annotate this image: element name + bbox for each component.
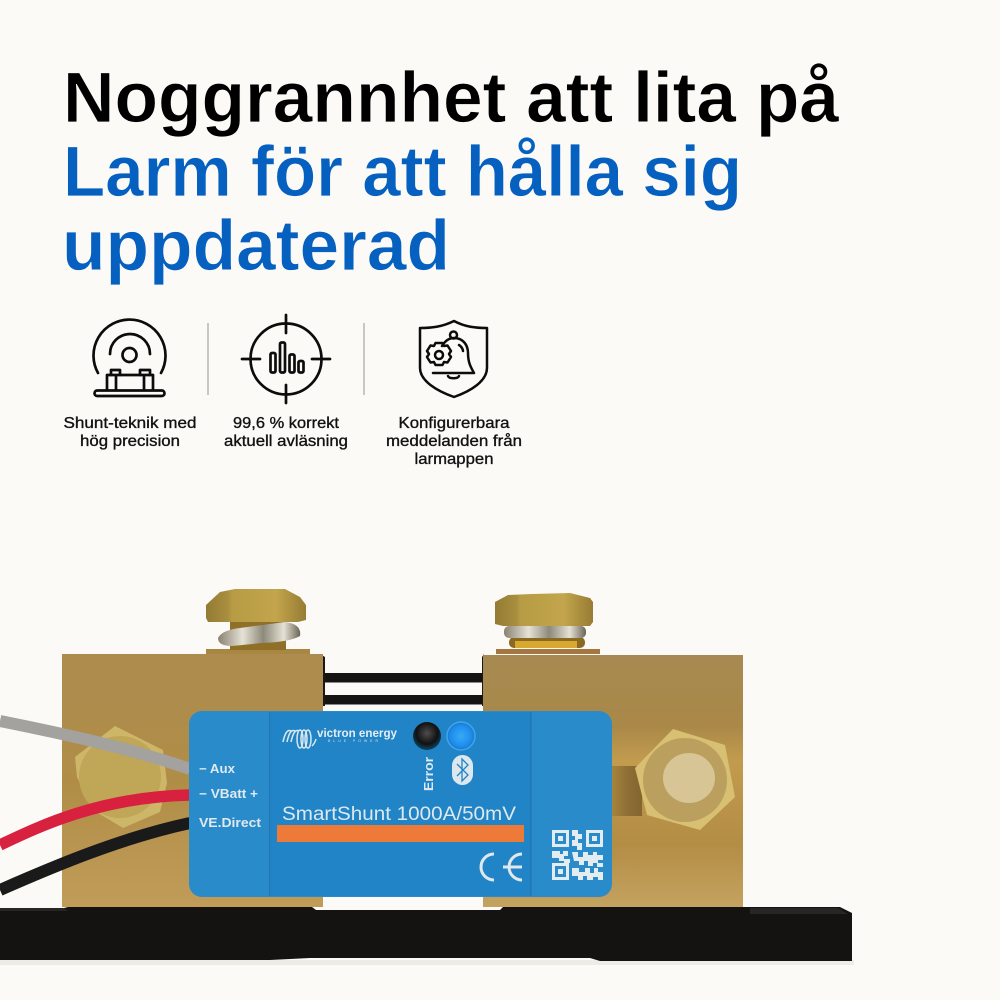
caption: alarm app: larmappen [414,451,494,468]
wire: grey [0,721,190,769]
title [62,59,840,286]
brass block left [62,654,323,907]
port labels: − VBatt + [199,787,258,801]
caption: alarm app [386,415,522,468]
caption: alarm app: meddelanden från [386,432,522,450]
bluetooth icon [452,755,473,785]
port labels [199,762,262,830]
victron logo [283,728,398,748]
subheading: blue lines: uppdaterad [62,207,450,286]
caption: alarm app: Konfigurerbara [398,415,510,432]
icon: shield with bell and gear [420,321,487,397]
product photo: SmartShunt [0,589,854,965]
caption: shunt technology [64,415,196,450]
icon: target with bars [242,315,330,403]
shunt resistor bars [320,654,485,706]
error LED: Error [422,757,436,791]
QR code [552,830,603,880]
top bolt right [495,593,600,654]
wire: black [0,823,190,890]
caption: accuracy: 99,6 % korrekt [233,415,340,432]
caption: accuracy: aktuell avläsning [224,433,348,450]
black mounting base [0,907,852,961]
port labels: VE.Direct [199,816,262,830]
caption: accuracy [224,415,348,450]
base shadow [0,960,854,965]
caption: shunt technology: hög precision [80,433,180,450]
icon: shunt [94,320,166,396]
caption: shunt technology: Shunt-teknik med [64,415,196,432]
large bolt left [75,726,167,828]
blue SmartShunt module [189,711,612,897]
error LED [413,722,441,791]
victron logo: victron energy [317,728,398,740]
victron logo: BLUE POWER [328,739,378,743]
wire: red [0,795,190,845]
model name: SmartShunt 1000A/50mV [282,804,516,825]
heading: black line: Noggrannhet att lita på [63,59,840,138]
divider 1 [207,323,209,395]
subheading: blue lines [62,133,742,286]
status LED [447,722,475,750]
CE mark [481,854,522,880]
subheading: blue lines: Larm för att hålla sig [63,133,742,212]
top bolt left [206,589,310,654]
brass block right [483,655,743,907]
divider 2 [363,323,365,395]
orange label bar [277,825,524,842]
large bolt right [612,729,735,830]
port labels: − Aux [199,762,235,776]
wires [0,721,190,890]
